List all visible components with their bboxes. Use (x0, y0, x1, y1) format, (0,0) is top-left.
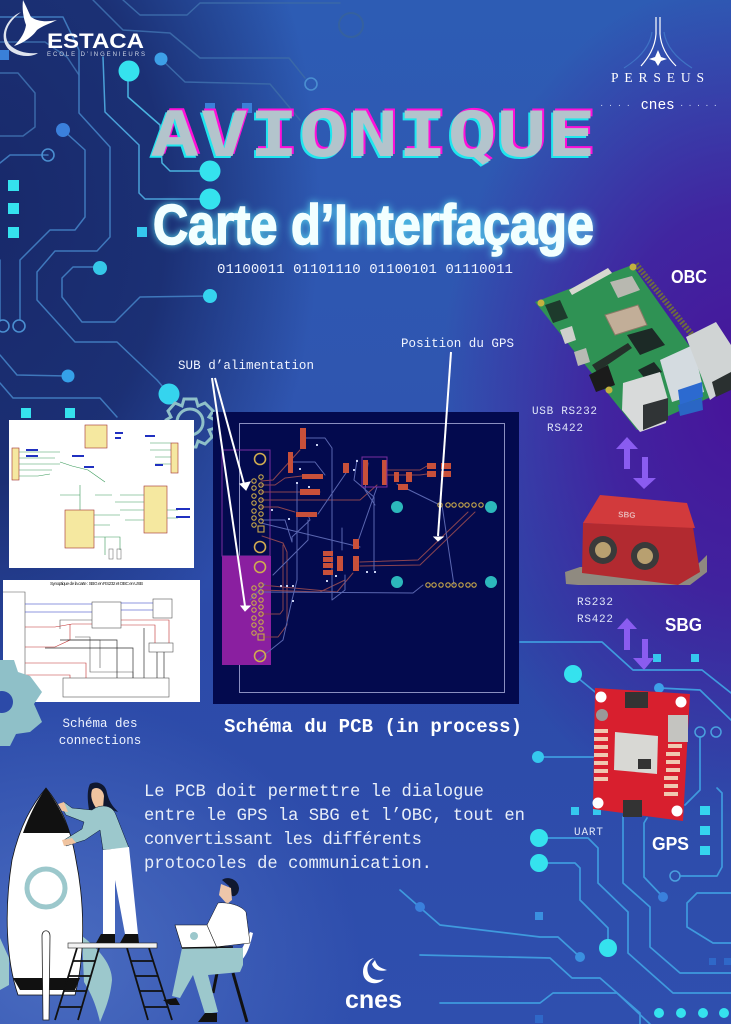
image: Raspberry Pi board (OBC) (535, 264, 731, 432)
circuit traces: upper left (0, 0, 363, 417)
label: RS232 RS422 (577, 597, 613, 626)
PCB pads (252, 454, 483, 662)
text block: PCB description: entre le GPS la SBG et l’OBC, tout en (144, 807, 525, 826)
text: connections (59, 734, 141, 748)
logo: PERSEUS: · · · · · (680, 100, 717, 111)
text block: PCB description: convertissant les différents (144, 831, 422, 850)
subtitle: Carte d'Interfaçage: Carte d’Interfaçage (153, 193, 594, 257)
logo: PERSEUS (600, 17, 717, 113)
image: connection synoptic diagram: Synoptique de la carte : SBG en RS232 et OBC en USB (50, 581, 143, 586)
circuit nodes: upper left (0, 50, 317, 418)
subtitle: Carte d'Interfaçage: Carte d’Interfaçage (153, 193, 594, 257)
logo: ESTACA (4, 0, 145, 58)
icon: outline gear (166, 399, 215, 447)
illustration: ladder platform (55, 943, 172, 1020)
text block: PCB description: Le PCB doit permettre le dialogue (144, 783, 484, 802)
label: USB RS232 RS422: RS422 (547, 423, 583, 435)
label: SUB d'alimentation: SUB d’alimentation (178, 359, 314, 373)
label: UART: UART (574, 827, 603, 839)
logo: CNES (345, 958, 402, 1014)
image: SBG inertial unit (565, 495, 707, 585)
binary text: 01100011 01101110 01100101 01110011 (217, 262, 513, 278)
title: AVIONIQUE: AVIONIQUE (150, 98, 596, 171)
logo: ESTACA: ESTACA (47, 30, 144, 53)
icon: filled gear (0, 660, 42, 746)
logo: CNES: cnes (345, 986, 402, 1014)
label: Schéma des connections: Schéma des (62, 717, 138, 731)
label: Position du GPS: Position du GPS (401, 337, 514, 351)
label: SBG: SBG (665, 614, 702, 635)
logo: PERSEUS: cnes (641, 97, 674, 113)
circuit traces and nodes: lower right (400, 642, 731, 1024)
arrows: SUB d'alimentation (212, 378, 250, 611)
label: USB RS232 RS422: USB RS232 (532, 406, 597, 418)
label: Schéma du PCB: Schéma du PCB (in process) (224, 716, 522, 738)
text block: PCB description: protocoles de communication. (144, 855, 432, 874)
arrow: Position du GPS (434, 352, 451, 541)
image: GPS module (592, 688, 690, 821)
label: USB RS232 RS422 (532, 406, 597, 435)
PCB components (288, 428, 451, 575)
image: circuit schematic (9, 420, 194, 568)
label: RS232 RS422: RS232 (577, 597, 613, 609)
text block: PCB description (144, 783, 525, 874)
PCB traces (261, 450, 475, 637)
logo: PERSEUS: PERSEUS (611, 70, 704, 85)
arrows: OBC to SBG (616, 437, 656, 489)
logo: ESTACA: ECOLE D’INGENIEURS (47, 52, 145, 58)
title: AVIONIQUE: AVIONIQUE (148, 100, 594, 173)
label: OBC: OBC (671, 266, 707, 287)
illustration: woman (58, 782, 139, 943)
illustration: man with laptop (163, 878, 253, 1022)
logo: PERSEUS: · · · · (600, 100, 630, 111)
panel: PCB layout (213, 412, 519, 704)
illustration: rocket (0, 788, 112, 1022)
image: SBG inertial unit: SBG (618, 510, 636, 520)
label: GPS: GPS (652, 833, 689, 854)
image: connection synoptic diagram (3, 580, 200, 702)
title: AVIONIQUE: AVIONIQUE (152, 96, 598, 169)
arrows: SBG to GPS (617, 618, 654, 670)
label: RS232 RS422: RS422 (577, 614, 613, 626)
